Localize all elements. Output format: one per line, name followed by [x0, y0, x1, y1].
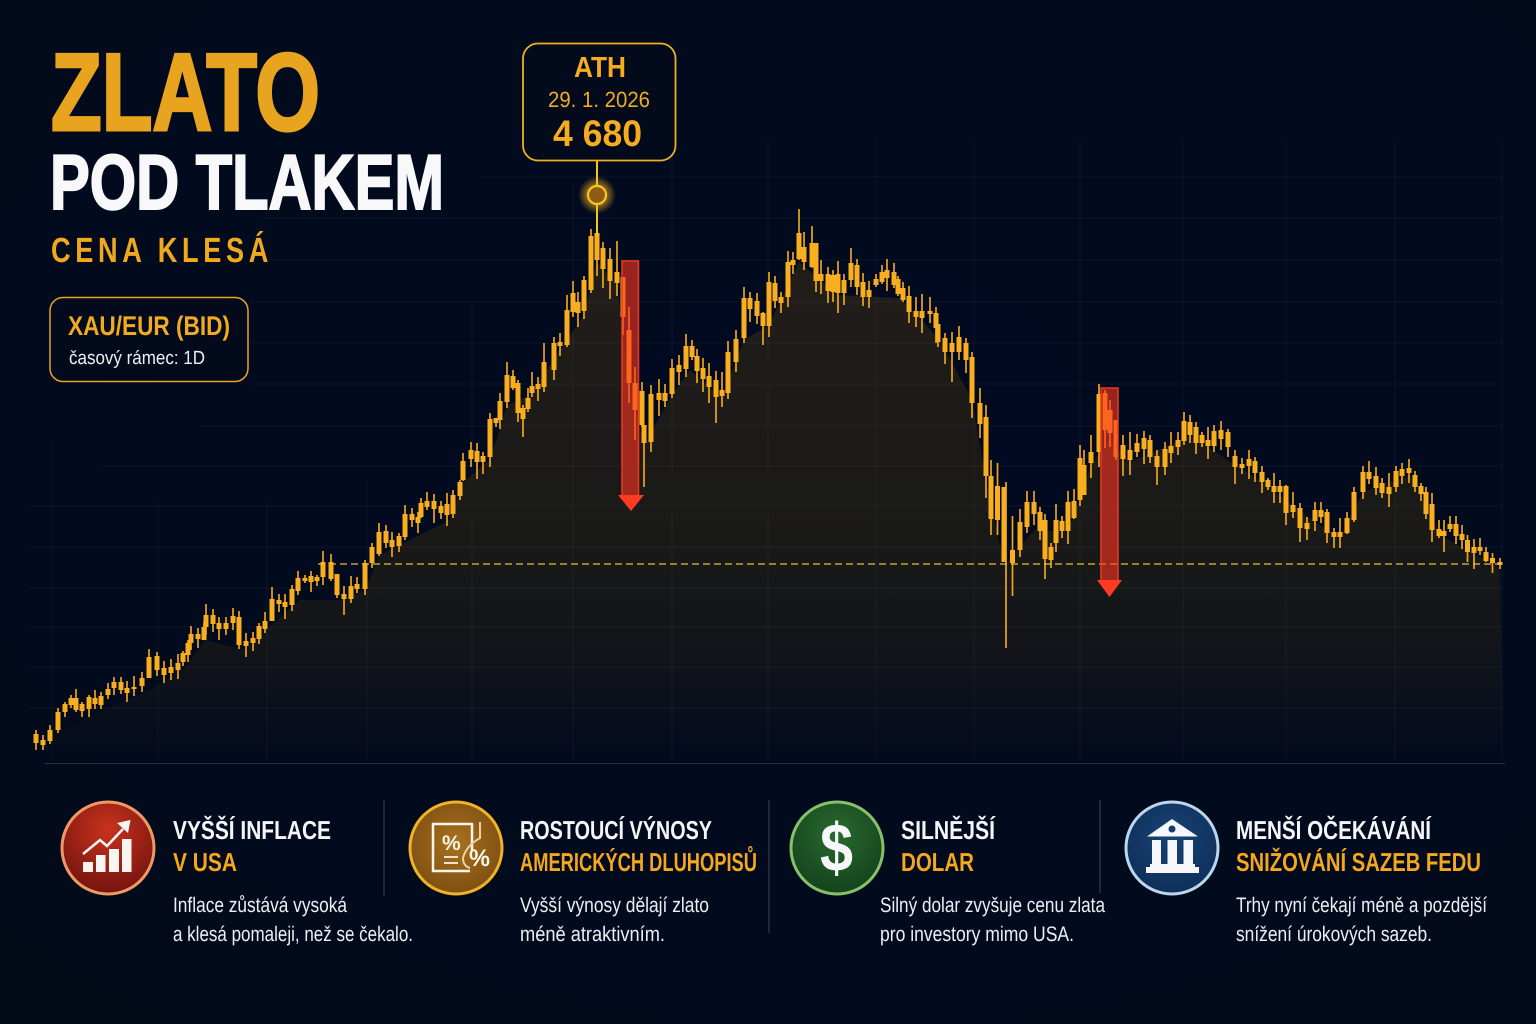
- instrument box: [50, 298, 248, 382]
- icon: dollar sign: [791, 802, 883, 894]
- cause 4: fed rate cuts: [1126, 802, 1487, 946]
- ATH callout: 29. 1. 2026: [548, 87, 650, 112]
- cause 4: fed rate cuts: snížení úrokových sazeb.: [1236, 923, 1432, 946]
- cause 2: bond yields: méně atraktivním.: [520, 923, 665, 946]
- red down arrow 1: [618, 261, 644, 511]
- ATH callout: [523, 44, 676, 160]
- icon: rising chart: [62, 802, 154, 894]
- instrument box: XAU/EUR (BID): [68, 311, 230, 341]
- dashed support line: [318, 563, 1500, 565]
- cause 3: stronger dollar: DOLAR: [901, 847, 974, 877]
- cause 3: stronger dollar: [791, 802, 1105, 946]
- chart baseline: [45, 762, 1505, 764]
- ATH marker: [578, 160, 616, 236]
- cause 2: bond yields: ROSTOUCÍ VÝNOSY: [520, 815, 712, 845]
- cause 2: bond yields: [410, 802, 757, 946]
- cause 2: bond yields: Vyšší výnosy dělají zlato: [520, 894, 709, 917]
- candlestick bodies: [36, 233, 1500, 745]
- ATH callout: ATH: [574, 52, 626, 84]
- cause 2: bond yields: AMERICKÝCH DLUHOPISŮ: [520, 845, 757, 877]
- icon: bond document with percent: %: [469, 845, 490, 872]
- instrument box: časový rámec: 1D: [69, 348, 205, 369]
- cause 4: fed rate cuts: Trhy nyní čekají méně a pozdější: [1236, 894, 1487, 917]
- title: POD TLAKEM: POD TLAKEM: [50, 138, 444, 226]
- icon: bank building: [1126, 802, 1218, 894]
- cause 1: inflation: VYŠŠÍ INFLACE: [173, 815, 331, 845]
- title: ZLATO: ZLATO: [51, 31, 320, 154]
- cause 3: stronger dollar: pro investory mimo USA.: [880, 923, 1074, 946]
- chart: [30, 140, 1505, 764]
- cause 4: fed rate cuts: MENŠÍ OČEKÁVÁNÍ: [1236, 815, 1432, 845]
- cause 1: inflation: a klesá pomaleji, než se čekalo.: [173, 923, 413, 946]
- cause 3: stronger dollar: SILNĚJŠÍ: [901, 815, 996, 845]
- cause 1: inflation: [62, 802, 413, 946]
- cause 1: inflation: V USA: [173, 847, 237, 877]
- cause 3: stronger dollar: Silný dolar zvyšuje cenu zlata: [880, 894, 1105, 917]
- subtitle: CENA KLESÁ: [51, 230, 273, 270]
- ATH callout: 4 680: [553, 113, 642, 154]
- icon: dollar sign: $: [820, 810, 853, 886]
- cause 1: inflation: Inflace zůstává vysoká: [173, 894, 347, 917]
- red down arrow 2: [1097, 388, 1122, 597]
- chart area fill: [40, 262, 1503, 756]
- icon: bond document with percent: [410, 802, 502, 894]
- candlestick wicks: [36, 209, 1500, 750]
- icon: bond document with percent: %: [442, 832, 461, 855]
